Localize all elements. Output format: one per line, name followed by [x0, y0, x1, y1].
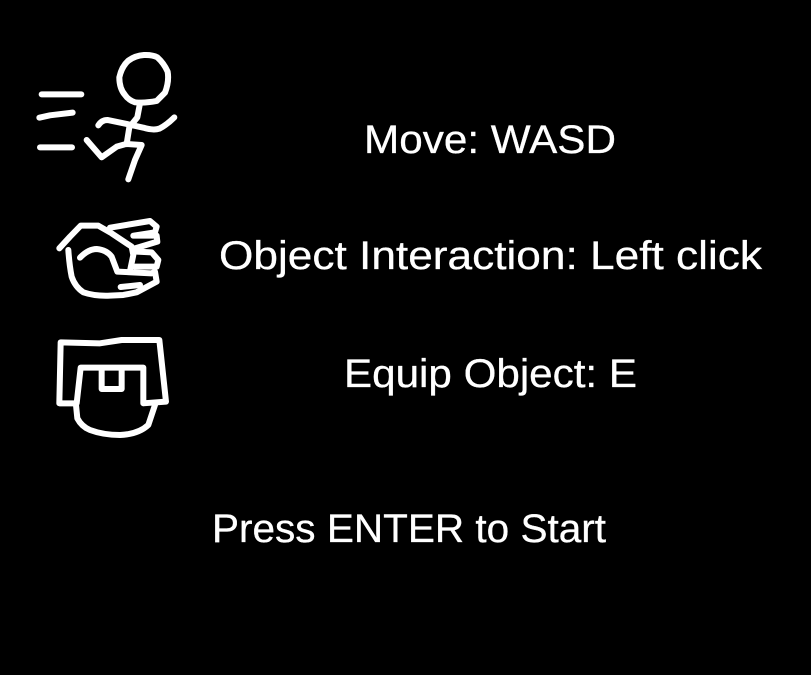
icon: backpack	[59, 340, 166, 435]
instruction: move: Move: WASD	[364, 118, 616, 162]
instruction: object interaction: Object Interaction: Left click	[219, 234, 763, 278]
icon: running stick figure	[39, 55, 174, 179]
instruction: equip object: Equip Object: E	[344, 352, 637, 396]
icon: grabbing hand	[59, 221, 158, 296]
prompt: press enter: Press ENTER to Start	[212, 507, 606, 551]
